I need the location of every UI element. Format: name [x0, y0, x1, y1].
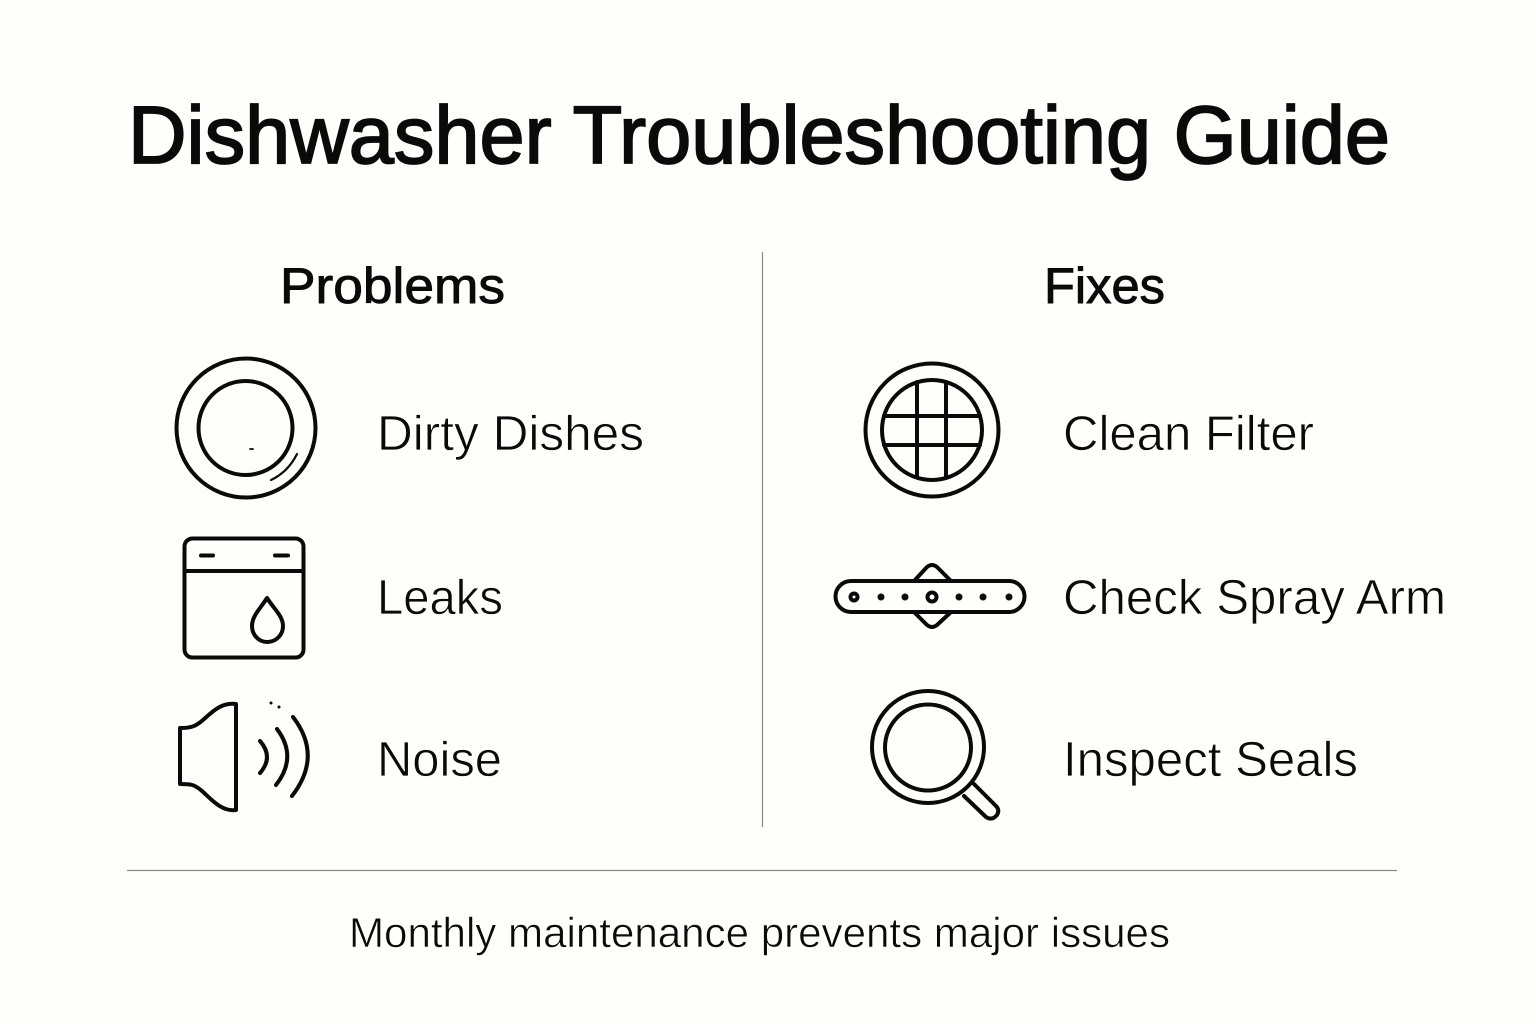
heading: problems: Problems [280, 258, 505, 314]
label: check spray arm: Check Spray Arm [1063, 571, 1446, 625]
icon: speaker noise [180, 702, 308, 810]
label: leaks: Leaks [377, 571, 503, 625]
icon: leaking dishwasher [184, 538, 304, 658]
label: dirty dishes: Dirty Dishes [377, 407, 644, 461]
label: clean filter: Clean Filter [1063, 407, 1314, 461]
label: noise: Noise [377, 733, 502, 787]
heading: fixes: Fixes [1044, 258, 1165, 314]
panel: fixes [836, 258, 1446, 819]
label: inspect seals: Inspect Seals [1063, 733, 1358, 787]
footer note: Monthly maintenance prevents major issues [349, 909, 1170, 956]
icon: filter [866, 364, 998, 496]
panel: problems [176, 258, 644, 810]
icon: spray arm [836, 565, 1024, 627]
icon: plate [176, 358, 316, 498]
title: Dishwasher Troubleshooting Guide [128, 90, 1390, 181]
icon: magnifying glass [872, 691, 998, 819]
